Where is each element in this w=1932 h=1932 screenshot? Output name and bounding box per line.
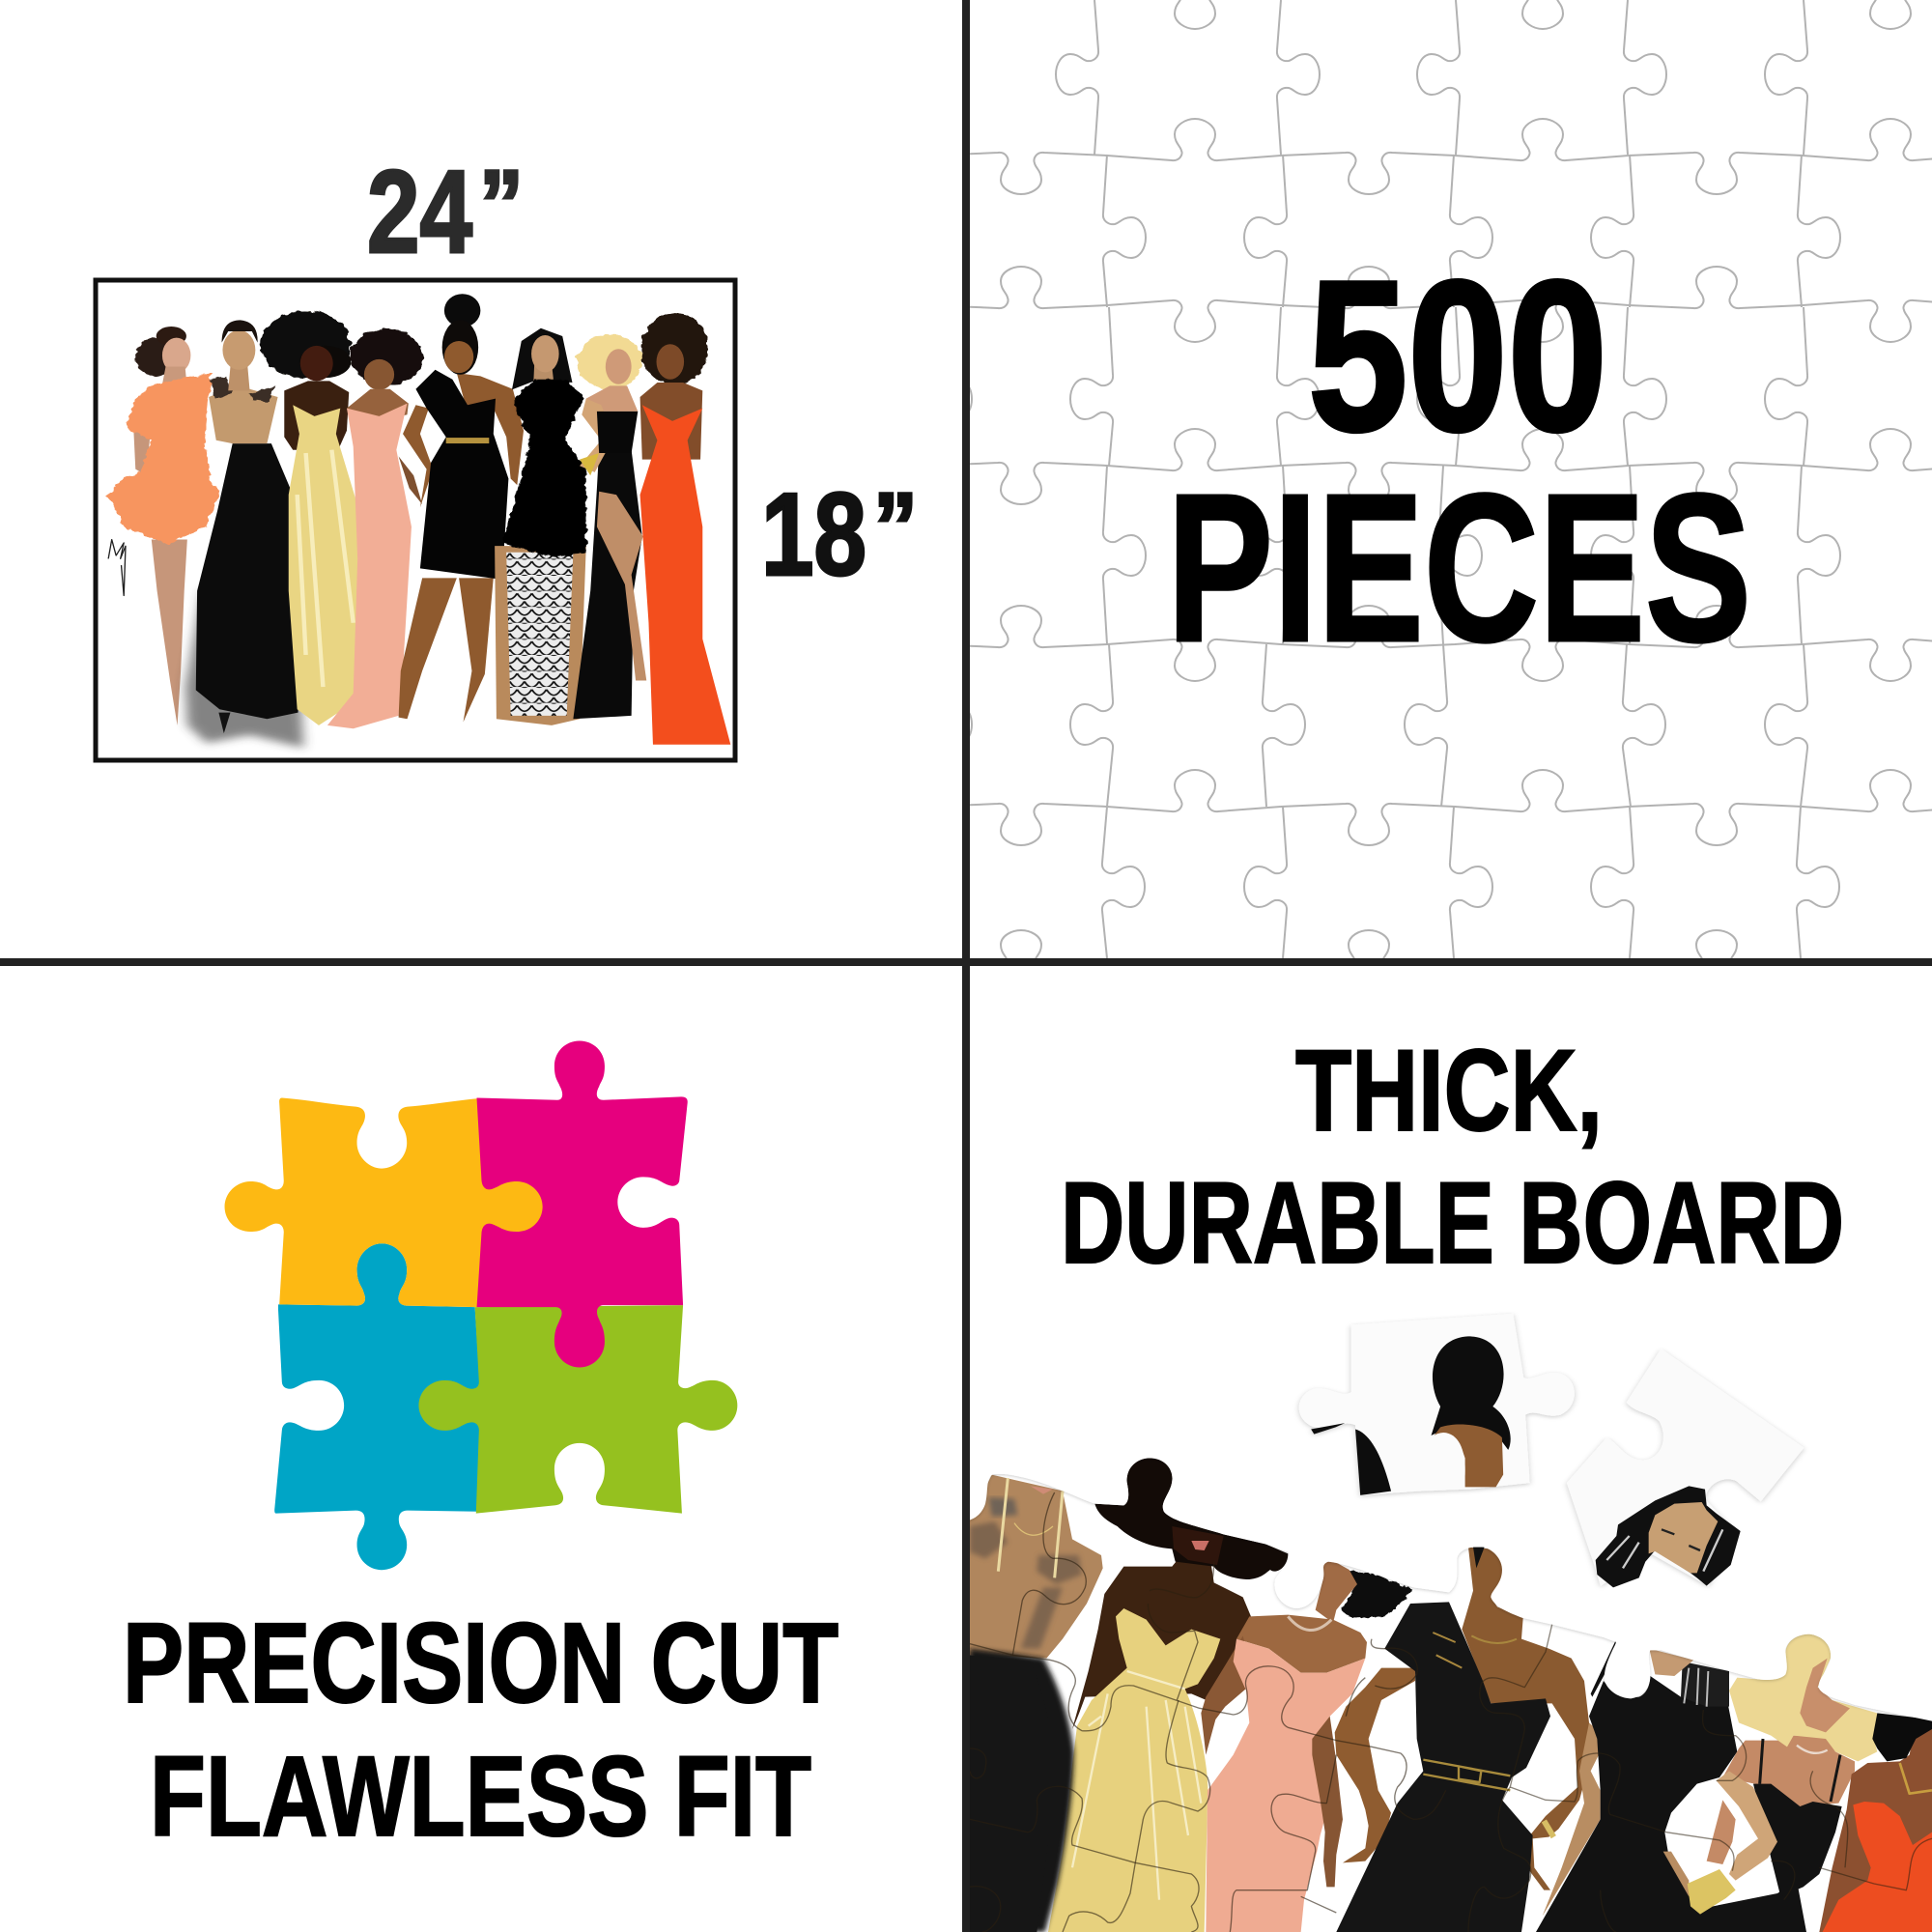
figure: orange-red gown xyxy=(1819,1713,1932,1932)
figure: pink gown xyxy=(327,328,423,728)
figure: arm of black dress xyxy=(1335,1668,1415,1862)
figure: black gown with braids xyxy=(1536,1639,1806,1932)
caption line 1: PRECISION CUT xyxy=(123,1600,838,1727)
heading: width 24 inches: 24 xyxy=(367,146,472,277)
figure: black gown with lace skirt xyxy=(495,328,586,725)
white upper puzzle edge xyxy=(970,1458,1932,1721)
panel: thick durable board xyxy=(970,1048,1932,1932)
figure: yellow gown xyxy=(1048,1558,1251,1932)
loose piece with braided hair face xyxy=(1567,1349,1804,1587)
puzzle cut lines, left xyxy=(970,1492,1446,1932)
caption line 2: FLAWLESS FIT xyxy=(150,1733,811,1861)
horizontal divider xyxy=(0,958,1932,966)
heading: height 18 inches: 18 xyxy=(761,469,867,600)
figure: black cocktail dress xyxy=(399,294,524,723)
icon: four interlocking puzzle pieces xyxy=(225,1041,737,1570)
assembled figures, left half xyxy=(970,1458,1415,1932)
artwork: eight women in gowns xyxy=(107,294,730,748)
hair and face xyxy=(1596,1486,1741,1587)
figure: yellow gown xyxy=(261,310,366,725)
heading: height 18 inches: ” xyxy=(873,473,918,582)
panel: precision cut xyxy=(123,1041,838,1861)
figure: sheer black gown xyxy=(970,1475,1103,1932)
puzzle cut lines, right xyxy=(1468,1625,1932,1932)
figure: blonde hair and black slit gown xyxy=(573,334,646,719)
blue piece xyxy=(274,1243,480,1570)
figure: pink gown xyxy=(1201,1562,1413,1932)
number 500: 500 xyxy=(1308,237,1607,476)
figure: afro hair xyxy=(1094,1458,1288,1579)
figure: blonde hair and straps dress xyxy=(1688,1634,1877,1915)
panel: piece count xyxy=(929,0,1932,1006)
signature xyxy=(108,540,126,596)
jigsaw outline pattern xyxy=(929,0,1932,1006)
loose piece with top bun xyxy=(1299,1314,1575,1495)
heading line 1: THICK, xyxy=(1295,1026,1603,1155)
figure: black dress with gold belt xyxy=(1336,1548,1601,1932)
heading: width 24 inches: ” xyxy=(479,151,524,259)
photo: assembled puzzle with loose pieces xyxy=(970,1314,1932,1932)
assembled figures, right half xyxy=(1336,1548,1932,1932)
panel: puzzle size xyxy=(96,146,918,760)
green piece xyxy=(418,1305,737,1514)
yellow piece xyxy=(225,1097,543,1307)
magenta piece xyxy=(476,1041,688,1367)
figure: coral dress xyxy=(107,327,219,725)
label PIECES: PIECES xyxy=(1167,451,1751,686)
artwork frame xyxy=(96,280,735,760)
figure: sheer black skirt xyxy=(185,320,303,748)
vertical divider xyxy=(962,0,970,1932)
figure: orange-red gown xyxy=(640,313,730,745)
bun and hair xyxy=(1432,1336,1511,1450)
